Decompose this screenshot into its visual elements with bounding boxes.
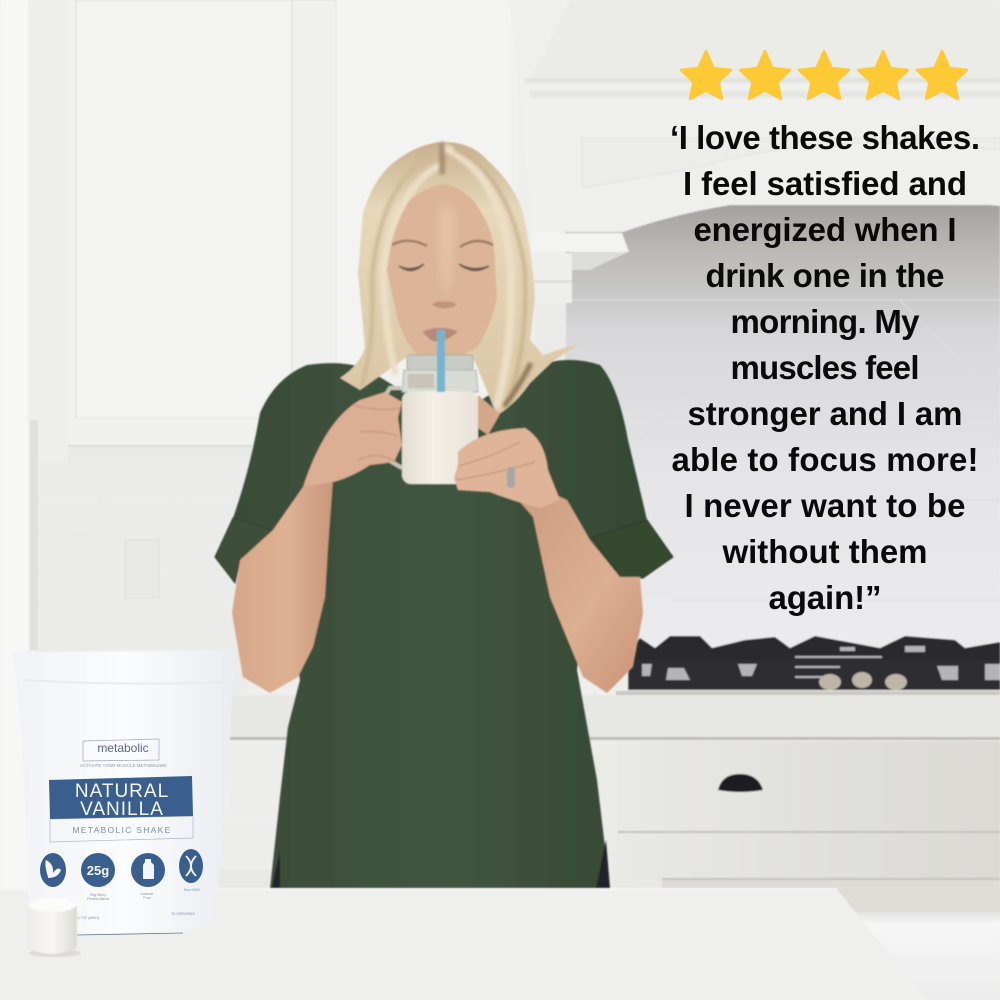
feature icons: Non GMO — [184, 888, 200, 892]
testimonial quote: able to focus more! — [672, 441, 978, 478]
powder scoop — [27, 898, 81, 957]
left arm — [232, 480, 333, 693]
stove — [616, 636, 1000, 695]
right arm — [505, 485, 643, 693]
lower cabinets — [218, 740, 1000, 913]
feature icons: 25g — [87, 863, 109, 878]
flavour banner: METABOLIC SHAKE — [72, 825, 172, 835]
brand box: metabolic — [97, 741, 149, 755]
five star rating — [681, 51, 967, 99]
hair — [340, 142, 580, 415]
brand box: ACTIVATE YOUR MUSCLE METABOLISM — [80, 763, 166, 768]
testimonial quote: again!” — [768, 579, 882, 616]
woman drinking a shake — [215, 142, 673, 889]
mason jar with milk — [385, 330, 478, 484]
testimonial quote: without them — [722, 533, 928, 570]
left hand — [303, 392, 402, 487]
back counter — [228, 695, 1000, 740]
flavour banner: NATURAL — [75, 781, 169, 802]
feature icons: 15 SERVINGS — [171, 912, 195, 916]
right hand with ring — [454, 428, 560, 508]
product bag: Natural Vanilla Metabolic Shake — [13, 650, 235, 935]
feature icons: Free — [143, 896, 151, 900]
front counter — [0, 888, 1000, 1000]
testimonial quote: ‘I love these shakes. — [670, 119, 980, 156]
testimonial quote: morning. My — [730, 303, 920, 340]
tile backsplash — [565, 205, 1000, 645]
testimonial quote — [670, 119, 980, 616]
feature icons: 25g Whey — [90, 893, 106, 897]
testimonial quote: I feel satisfied and — [683, 165, 967, 202]
wall cabinets — [68, 0, 518, 462]
feature icons: Protein Blend — [87, 897, 109, 901]
testimonial quote: stronger and I am — [688, 395, 962, 432]
neck skin — [478, 395, 500, 435]
testimonial quote: I never want to be — [684, 487, 966, 524]
feature icons — [40, 849, 203, 920]
outlet — [125, 540, 159, 598]
feature icons: 17 OZ (480G) — [77, 916, 99, 920]
flavour banner: VANILLA — [80, 799, 164, 820]
testimonial quote: energized when I — [694, 211, 956, 248]
range hood — [510, 0, 1000, 353]
testimonial quote: drink one in the — [706, 257, 944, 294]
shirt — [215, 360, 673, 889]
face — [387, 184, 497, 360]
testimonial quote: muscles feel — [730, 349, 920, 386]
flavour banner — [49, 776, 193, 842]
feature icons: Lactose — [141, 892, 153, 896]
brand box — [80, 739, 166, 768]
